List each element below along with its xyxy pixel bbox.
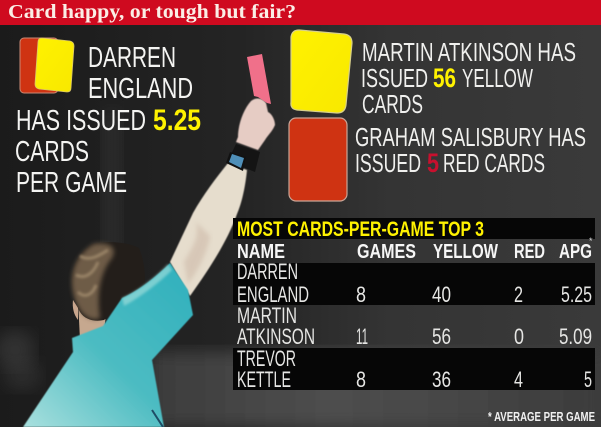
row: Martin Atkinson: 56	[432, 324, 451, 349]
icon: red and yellow cards	[20, 38, 74, 93]
row: Trevor Kettle	[233, 346, 595, 392]
table header row	[237, 236, 593, 263]
text: Graham Salisbury stat	[355, 122, 586, 178]
panel: Darren England	[15, 38, 201, 199]
text: Darren England stat: ENGLAND	[88, 73, 193, 105]
text: Darren England stat	[15, 42, 201, 199]
row: Darren England: ENGLAND	[237, 282, 309, 307]
referee figure	[23, 54, 275, 427]
neck	[78, 300, 108, 340]
row: Darren England	[233, 259, 595, 307]
text: Darren England stat: DARREN	[88, 42, 176, 74]
row: Darren England: 2	[514, 282, 523, 307]
text: Darren England stat: PER GAME	[16, 167, 127, 199]
red card held aloft	[247, 54, 271, 104]
text: Martin Atkinson stat: 56	[433, 63, 456, 93]
panel: Martin Atkinson	[291, 30, 576, 119]
hand	[236, 99, 275, 150]
arm	[170, 163, 247, 296]
title: Card happy, or tough but fair?	[8, 1, 296, 23]
wristwatch	[226, 144, 260, 172]
row: Martin Atkinson: 11	[356, 324, 368, 349]
hair	[72, 242, 145, 321]
row: Martin Atkinson: 5.09	[559, 324, 592, 349]
teal shirt	[23, 263, 193, 427]
row: Martin Atkinson: ATKINSON	[237, 324, 315, 349]
text: Martin Atkinson stat: YELLOW	[462, 63, 533, 93]
row: Martin Atkinson	[237, 303, 592, 349]
table header row: RED	[514, 241, 545, 263]
table: most cards per game	[233, 218, 595, 392]
row: Darren England: DARREN	[237, 259, 298, 284]
row: Trevor Kettle: TREVOR	[237, 346, 296, 371]
panel: Graham Salisbury	[289, 118, 586, 201]
text: Martin Atkinson stat	[361, 37, 576, 119]
text: Graham Salisbury stat: ISSUED	[355, 148, 421, 178]
row: Darren England: 40	[432, 282, 451, 307]
row: Martin Atkinson: MARTIN	[237, 303, 297, 328]
table header row: GAMES	[357, 241, 416, 263]
row: Trevor Kettle: 4	[514, 367, 523, 392]
row: Trevor Kettle: 36	[432, 367, 451, 392]
row: Trevor Kettle: 5	[584, 367, 592, 392]
row: Darren England: 8	[356, 282, 366, 307]
text: Martin Atkinson stat: ISSUED	[361, 63, 428, 93]
icon: yellow card	[291, 30, 352, 113]
text: Darren England stat: 5.25	[153, 104, 201, 137]
text: Martin Atkinson stat: CARDS	[362, 89, 423, 119]
text: Graham Salisbury stat: 5	[427, 148, 439, 178]
table header row: YELLOW	[433, 241, 498, 263]
table header row: NAME	[237, 241, 285, 263]
text: Graham Salisbury stat: RED CARDS	[443, 148, 545, 178]
text: Darren England stat: HAS ISSUED	[16, 105, 146, 137]
row: Trevor Kettle: 8	[356, 367, 366, 392]
header band	[0, 0, 601, 25]
table header row: *	[589, 236, 593, 246]
icon: red card	[289, 118, 347, 201]
row: Trevor Kettle: KETTLE	[237, 367, 291, 392]
table title bar: MOST CARDS-PER-GAME TOP 3	[237, 218, 484, 241]
text: Darren England stat: CARDS	[15, 136, 89, 168]
row: Martin Atkinson: 0	[514, 324, 524, 349]
